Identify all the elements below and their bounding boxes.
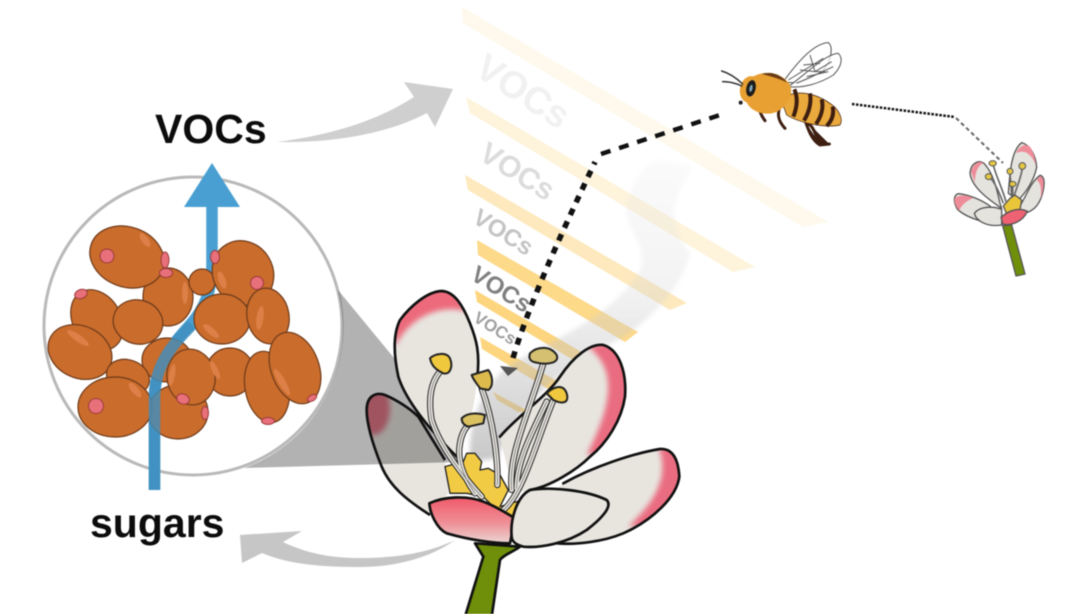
right upper petal [500, 340, 637, 493]
anthers [430, 348, 567, 427]
abdomen stripes [793, 89, 833, 126]
cluster of orange cells [39, 216, 330, 439]
dashed flight path: bee to flower [513, 114, 723, 358]
flower front parts [429, 340, 687, 614]
green stem [465, 543, 520, 614]
front legs [758, 98, 785, 128]
left petal [368, 394, 448, 513]
antennae [722, 71, 743, 86]
VOCs scent labels: VOCs [468, 204, 538, 261]
grey arrow: flower to sugars [240, 531, 455, 567]
top left petal [390, 280, 478, 457]
hind leg [805, 120, 829, 145]
small petals [954, 143, 1044, 225]
small yellow centre [1003, 195, 1022, 214]
wings [783, 43, 841, 87]
small sepal [1001, 209, 1027, 225]
thorax [745, 73, 791, 114]
honey bee [722, 43, 841, 145]
front right petal [511, 489, 608, 547]
small filaments [989, 165, 1022, 203]
head [737, 74, 763, 104]
VOCs scent labels: VOCs [468, 46, 577, 138]
small anthers [985, 161, 1026, 187]
small front petal [974, 207, 1002, 225]
main flower [368, 394, 448, 513]
right petal [556, 446, 682, 546]
VOCs scent labels [466, 46, 577, 349]
pink sepal [429, 497, 515, 543]
eye [745, 79, 757, 97]
thin dotted path to distant flower [852, 104, 1003, 163]
label: sugars: sugars [90, 500, 224, 546]
smoke plume of volatiles [470, 160, 693, 462]
small distant flower [954, 143, 1044, 276]
blue arrow behind cells [154, 163, 240, 490]
thorax top shading [762, 73, 787, 83]
grey arrow: flower to VOCs [277, 82, 453, 142]
stamens [430, 363, 553, 510]
small stem [1003, 225, 1025, 276]
blue arrow passing over lower cells [154, 325, 192, 490]
small petal tips [955, 145, 1044, 211]
grey magnification cone [244, 290, 458, 468]
mouth [739, 101, 743, 105]
left petal outline [367, 394, 445, 515]
label: VOCs: VOCs [155, 106, 267, 152]
abdomen [782, 93, 841, 126]
VOCs scent labels: VOCs [474, 136, 560, 208]
scent bands fading away from the flower [462, 7, 828, 412]
VOCs scent labels: VOCs [466, 261, 536, 318]
magnified nectar cell circle [44, 177, 342, 475]
VOCs scent labels: VOCs [470, 308, 520, 349]
flight path arrowhead [500, 366, 518, 376]
yellow floral centre [445, 453, 522, 518]
upper flower parts [367, 280, 478, 515]
